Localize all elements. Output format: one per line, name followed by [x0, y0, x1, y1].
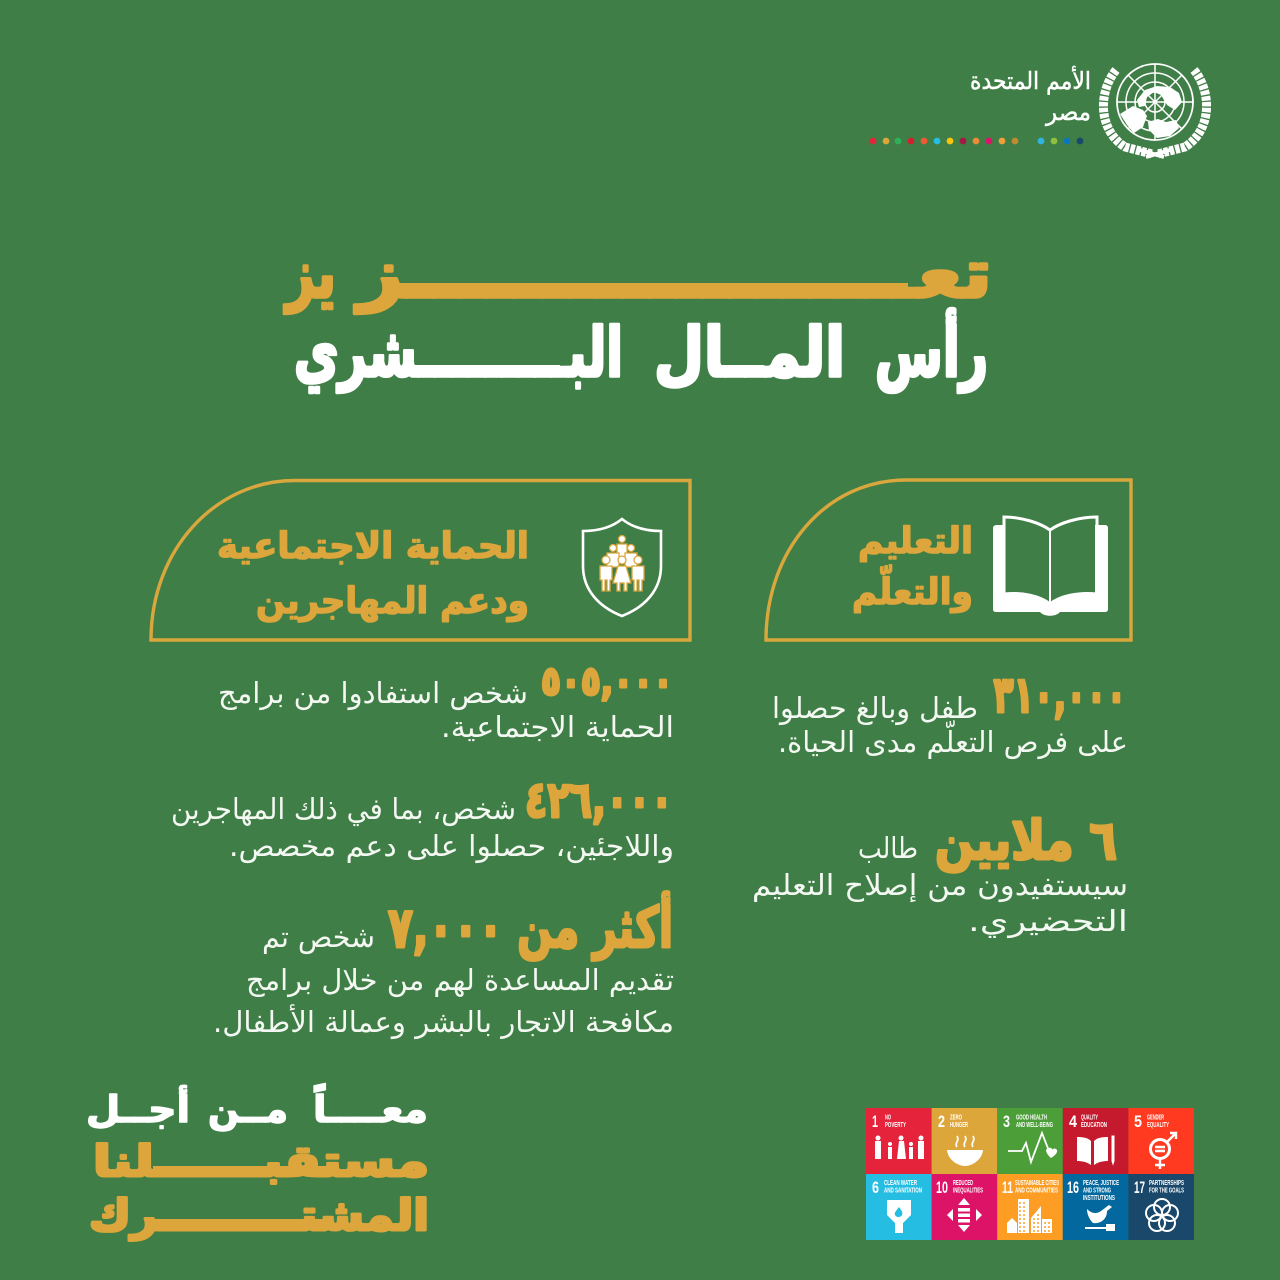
SDG 6: 6 [872, 1178, 879, 1197]
SDG 1: POVERTY [885, 1122, 906, 1129]
panel outline [151, 480, 690, 640]
SDG 17: PARTNERSHIPS [1149, 1180, 1184, 1187]
logo: UN Egypt [870, 64, 1207, 157]
SDG 3 [997, 1108, 1063, 1174]
panel: education and learning [766, 480, 1131, 640]
slogan line 1: مــن [208, 1088, 288, 1131]
panel heading: ودعم المهاجرين [256, 581, 529, 622]
SDG 10 [932, 1174, 997, 1240]
SDG 5: 5 [1134, 1112, 1142, 1131]
SDG 16: 16 [1067, 1178, 1079, 1197]
SDG 6 [866, 1174, 932, 1240]
text block: 505,000 people: الحماية الاجتماعية. [441, 710, 674, 744]
title line 2: المــال [654, 314, 845, 393]
text block: 426,000 people: ٤٢٦,٠٠٠ [525, 771, 673, 829]
icon: shield with people [583, 519, 661, 616]
SDG 11: 11 [1002, 1178, 1013, 1197]
panel outline [766, 480, 1131, 640]
SDG 17: FOR THE GOALS [1149, 1188, 1184, 1194]
slogan line 3: المشتـــــــــرك [89, 1191, 429, 1241]
SDG 11: AND COMMUNITIES [1015, 1188, 1058, 1194]
SDG 2: ZERO [950, 1114, 962, 1122]
SDG 6: AND SANITATION [884, 1188, 922, 1194]
SDG 11: SUSTAINABLE CITIES [1015, 1180, 1059, 1187]
slogan line 1: معــــاً [313, 1083, 428, 1131]
slogan line 1: أجــل [86, 1085, 190, 1131]
SDG 5: EQUALITY [1147, 1122, 1169, 1129]
SDG 2: 2 [938, 1112, 945, 1131]
SDG 4: EDUCATION [1081, 1122, 1107, 1129]
logo text [970, 66, 1091, 126]
text block: 426,000 people: شخص، بما في ذلك المهاجرين [171, 792, 516, 827]
SDG 3: GOOD HEALTH [1016, 1114, 1047, 1122]
text block: 310,000 children and adults: طفل وبالغ حصلوا [772, 691, 978, 725]
panel heading: التعليم [858, 521, 973, 562]
text block: 310,000 children and adults [772, 666, 1128, 760]
SDG 10: REDUCED [953, 1180, 973, 1187]
SDG 4: QUALITY [1081, 1114, 1098, 1122]
title line 2 [294, 308, 988, 393]
title line 1: تعـــــــــــــــــــز [355, 235, 992, 314]
logo text: مصر [1045, 98, 1091, 126]
SDG 2: HUNGER [950, 1122, 968, 1129]
SDG 16: INSTITUTIONS [1083, 1195, 1115, 1202]
SDG 17 [1128, 1174, 1194, 1240]
text block: 426,000 people [171, 771, 674, 864]
colored SDG dots [870, 138, 1083, 144]
SDG 10: INEQUALITIES [953, 1188, 983, 1194]
SDG 5 [1128, 1108, 1194, 1174]
text block: more than 7,000 people: مكافحة الاتجار بالبشر وعمالة الأطفال. [213, 1003, 674, 1039]
SDG 1: 1 [872, 1112, 878, 1131]
title [284, 235, 992, 393]
title line 2: البـــــــــشري [294, 314, 623, 393]
SDG 17: 17 [1134, 1178, 1145, 1197]
SDG 6: CLEAN WATER [884, 1180, 917, 1187]
SDG 4 [1063, 1108, 1128, 1174]
SDG 1 [866, 1108, 932, 1174]
logo text: الأمم المتحدة [970, 66, 1091, 95]
text block: 426,000 people: واللاجئين، حصلوا على دعم مخصص. [229, 829, 674, 864]
SDG 3: 3 [1003, 1112, 1010, 1131]
text block: 310,000 children and adults: ٣١٠,٠٠٠ [994, 666, 1126, 724]
SDG 16 [1063, 1174, 1128, 1240]
panel heading: والتعلّم [852, 564, 973, 613]
text block: more than 7,000 people [213, 891, 674, 1039]
text block: 310,000 children and adults: على فرص التعلّم مدى الحياة. [778, 721, 1128, 760]
SDG 16: PEACE, JUSTICE [1083, 1180, 1119, 1187]
SDG 1: NO [885, 1114, 891, 1122]
text block: 6 million students: طالب [858, 831, 918, 865]
SDG 4: 4 [1069, 1112, 1077, 1131]
icon: open book [993, 517, 1108, 616]
SDG 16: AND STRONG [1083, 1188, 1111, 1194]
title line 2: رأس [875, 308, 988, 393]
text block: 6 million students: التحضيري. [968, 904, 1128, 938]
SDG 3: AND WELL-BEING [1016, 1122, 1053, 1129]
slogan line 1 [86, 1083, 428, 1131]
SDG 2 [932, 1108, 997, 1174]
text block: 6 million students: ٦ ملايين [935, 809, 1117, 872]
SDG icons grid [866, 1108, 1194, 1240]
slogan [86, 1083, 429, 1241]
icon: UN emblem [1103, 64, 1207, 157]
text block: 505,000 people: شخص استفادوا من برامج [218, 676, 528, 710]
text block: 505,000 people [218, 659, 674, 744]
text block: 505,000 people: ٥٠٥,٠٠٠ [541, 659, 673, 705]
title line 1: يز [284, 235, 336, 314]
SDG 10: 10 [936, 1178, 948, 1197]
text block: more than 7,000 people: شخص تم [262, 920, 375, 955]
panel: social protection and migrant support [151, 480, 690, 640]
panel heading: الحماية الاجتماعية [217, 526, 529, 567]
text block: 6 million students [752, 809, 1128, 938]
SDG 5: GENDER [1147, 1114, 1164, 1122]
text block: more than 7,000 people: أكثر من ٧,٠٠٠ [388, 891, 673, 961]
SDG 11 [997, 1174, 1063, 1240]
text block: more than 7,000 people: تقديم المساعدة لهم من خلال برامج [246, 963, 674, 998]
slogan line 2: مستقبــــــلنا [93, 1137, 429, 1187]
panel heading [852, 521, 973, 613]
text block: 6 million students: سيستفيدون من إصلاح التعليم [752, 868, 1128, 903]
panel heading [217, 526, 529, 622]
